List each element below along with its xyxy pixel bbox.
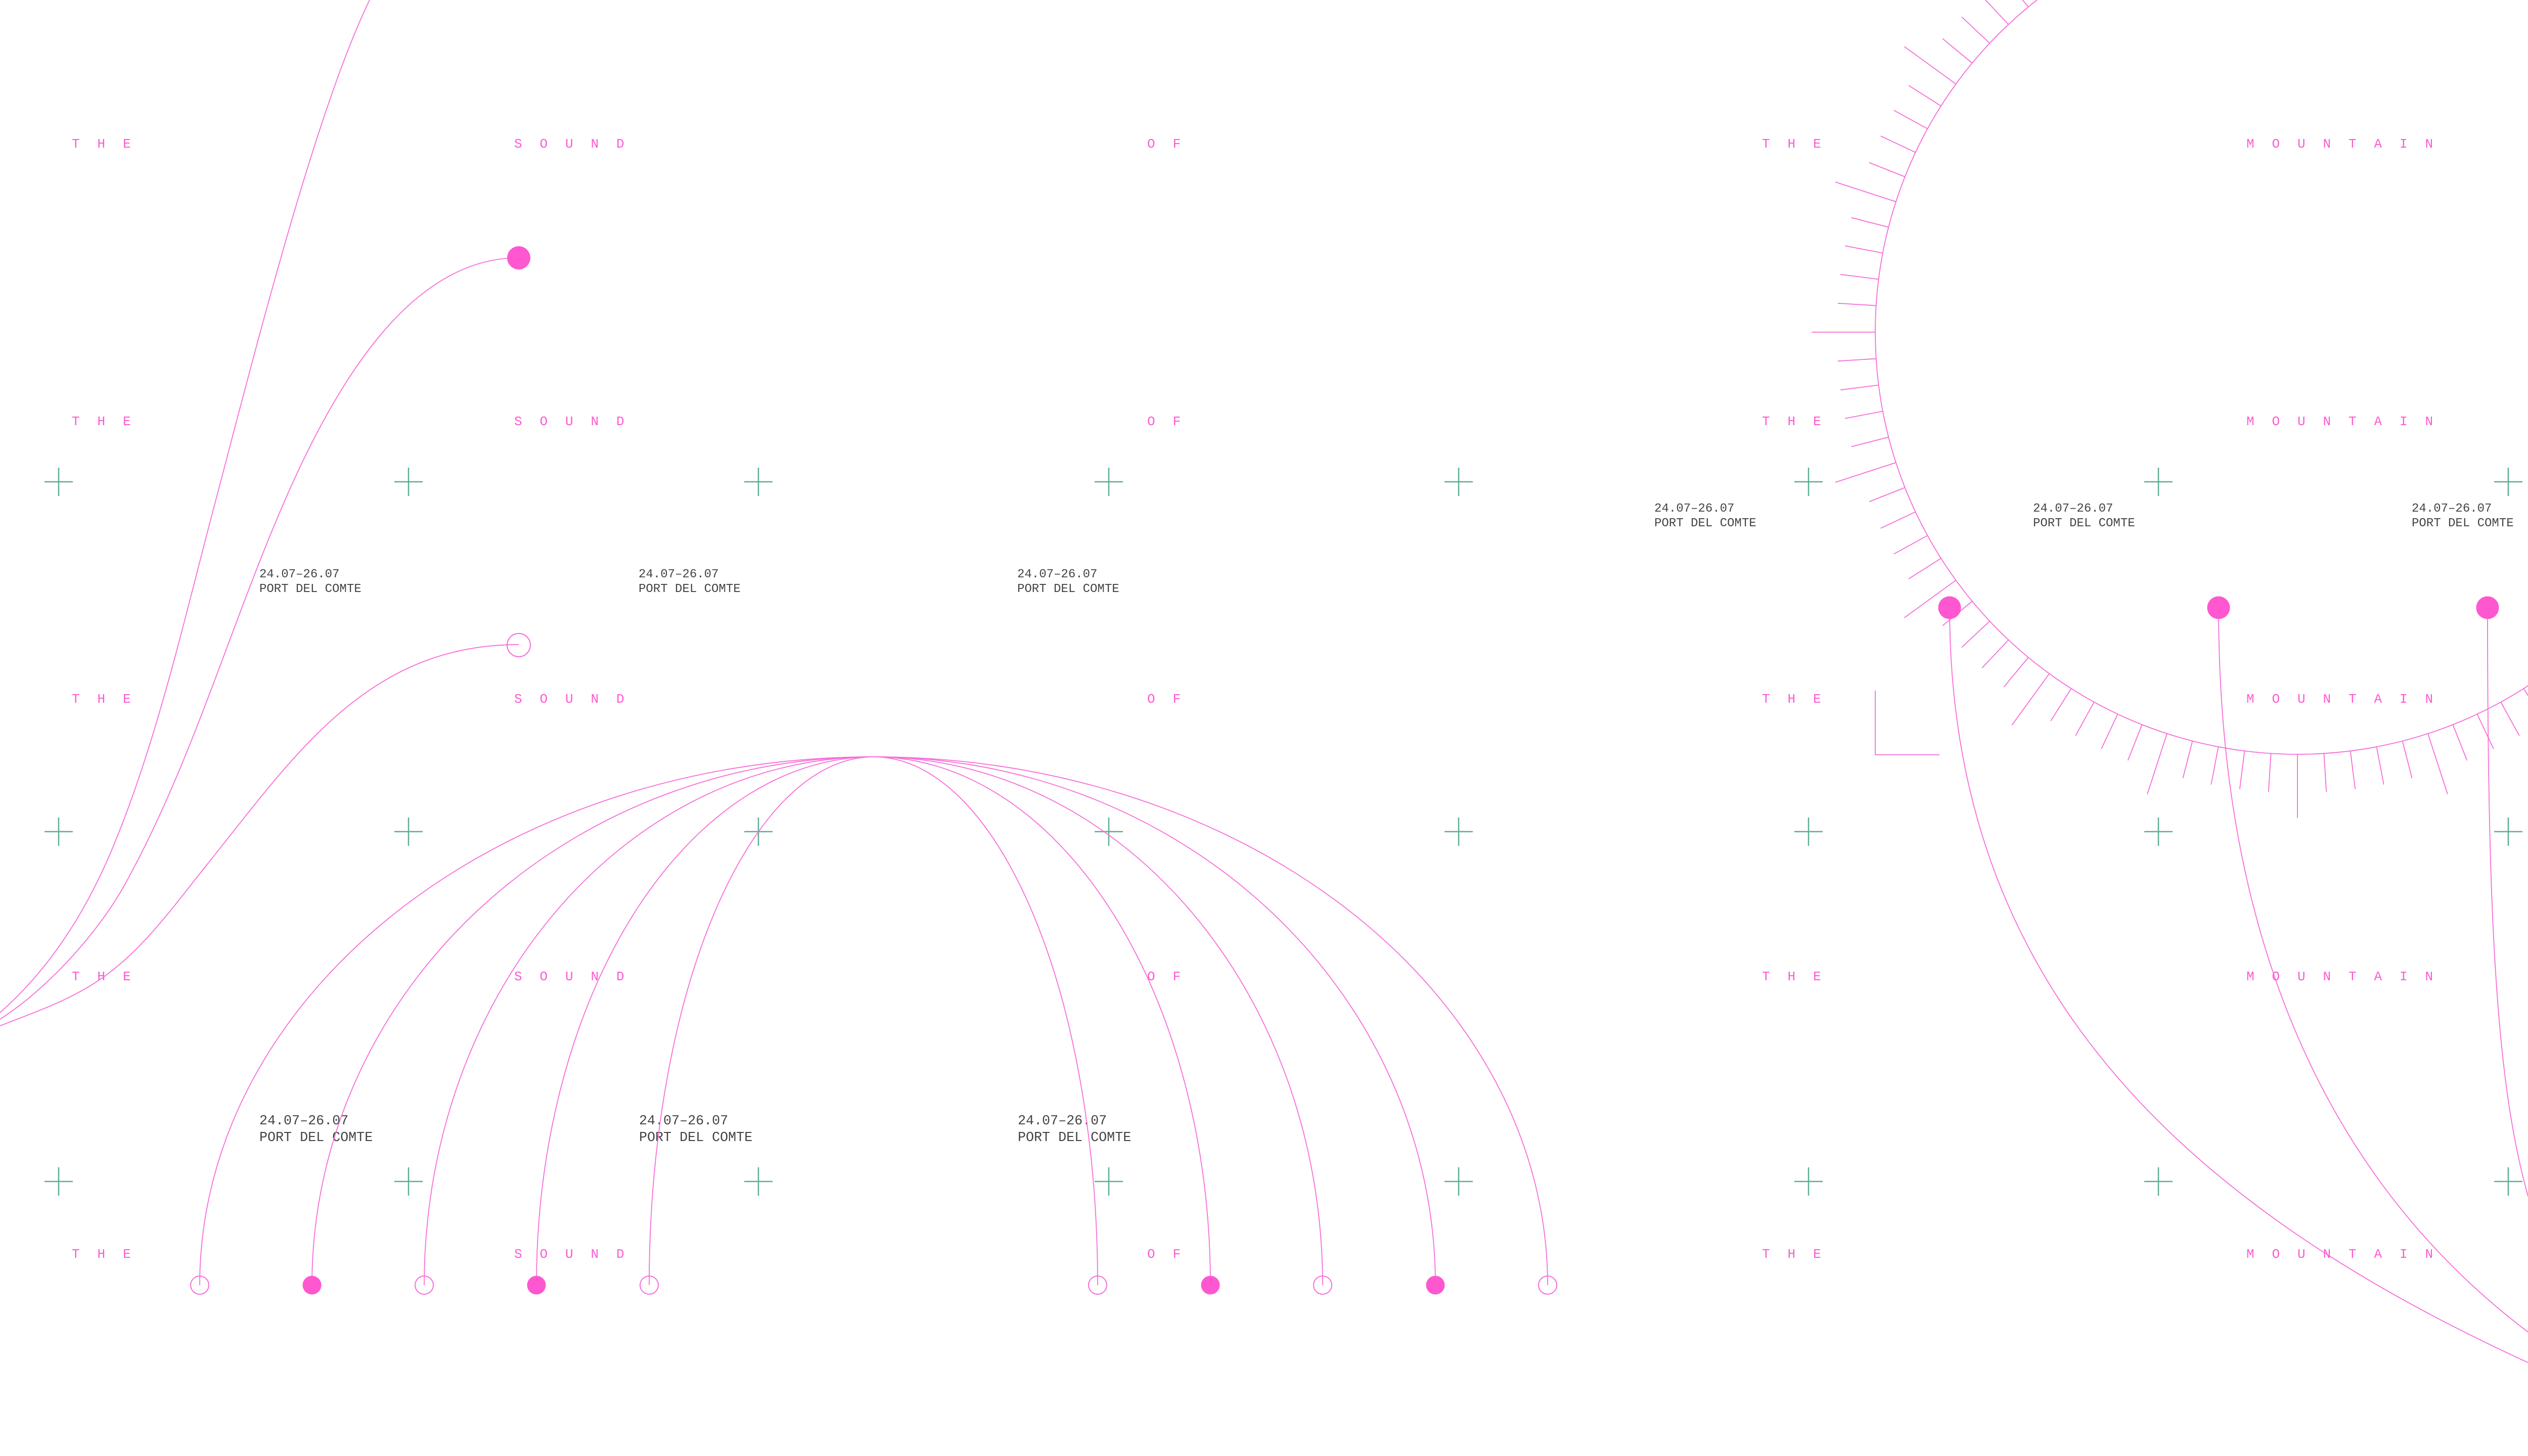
tick ring circle <box>1812 0 2528 818</box>
caption 7 <box>1654 502 1756 530</box>
left sweeping curves <box>0 0 530 1026</box>
title row 3: THE <box>1762 692 1839 707</box>
title row 2: MOUNTAIN <box>2246 414 2451 429</box>
title row 4: OF <box>1147 969 1198 984</box>
registration cross grid <box>44 468 2522 1196</box>
arch 6 with open dot <box>874 757 1107 1294</box>
arch 1 with open dot <box>191 757 874 1294</box>
title row 5: SOUND <box>514 1247 642 1262</box>
curve from second filled dot <box>2207 597 2528 1374</box>
title row 1: THE <box>72 136 149 152</box>
caption 6 <box>1018 1114 1131 1146</box>
title row 4: THE <box>1762 969 1839 984</box>
caption 3: PORT DEL COMTE <box>1017 582 1119 596</box>
caption 5: 24.07–26.07 <box>639 1114 728 1129</box>
arch 3 with open dot <box>415 757 874 1294</box>
caption 8 <box>2033 502 2135 530</box>
caption 7: 24.07–26.07 <box>1654 502 1734 516</box>
title row 2: THE <box>1762 414 1839 429</box>
title row 5: THE <box>72 1247 149 1262</box>
title row 5: MOUNTAIN <box>2246 1247 2451 1262</box>
corner bracket of the circle <box>1875 691 1939 755</box>
title row 4: SOUND <box>514 969 642 984</box>
title row 3 <box>72 692 2451 707</box>
caption 7: PORT DEL COMTE <box>1654 517 1756 530</box>
title row 2 <box>72 414 2451 429</box>
curve running off the top edge <box>0 0 370 1013</box>
caption 1: 24.07–26.07 <box>259 568 339 581</box>
arch 5 with open dot <box>640 757 874 1294</box>
title row 2: OF <box>1147 414 1198 429</box>
title row 3: MOUNTAIN <box>2246 692 2451 707</box>
title row 3: OF <box>1147 692 1198 707</box>
title row 1: OF <box>1147 136 1198 152</box>
arch 9 with filled dot <box>874 757 1445 1294</box>
caption 6: PORT DEL COMTE <box>1018 1130 1131 1146</box>
date and place captions, lower left row <box>259 1114 1131 1146</box>
caption 2 <box>639 568 741 596</box>
repeated title rows: THE SOUND OF THE MOUNTAIN <box>72 136 2451 1262</box>
arch 4 with filled dot <box>527 757 874 1294</box>
curve from first filled dot <box>1938 597 2528 1389</box>
title row 4 <box>72 969 2451 984</box>
arch 2 with filled dot <box>302 757 874 1294</box>
title row 1: THE <box>1762 136 1839 152</box>
title row 1 <box>72 136 2451 152</box>
title row 4: THE <box>72 969 149 984</box>
title row 3: THE <box>72 692 149 707</box>
title row 3: SOUND <box>514 692 642 707</box>
arch 8 with open dot <box>874 757 1332 1294</box>
arch 7 with filled dot <box>874 757 1220 1294</box>
title row 2: SOUND <box>514 414 642 429</box>
title row 4: MOUNTAIN <box>2246 969 2451 984</box>
arch of elliptical curves <box>191 757 1557 1294</box>
title row 5: OF <box>1147 1247 1198 1262</box>
curve from third filled dot <box>2476 597 2528 1330</box>
caption 5: PORT DEL COMTE <box>639 1130 752 1146</box>
caption 2: 24.07–26.07 <box>639 568 718 581</box>
curve ending in open dot <box>0 633 530 1026</box>
radial ticks <box>1812 0 2528 818</box>
caption 3 <box>1017 568 1119 596</box>
date and place captions, upper right row <box>1654 502 2514 530</box>
caption 4: PORT DEL COMTE <box>259 1130 373 1146</box>
date and place captions, upper left row <box>259 568 1119 596</box>
caption 1: PORT DEL COMTE <box>259 582 362 596</box>
title row 1: SOUND <box>514 136 642 152</box>
caption 4 <box>259 1114 373 1146</box>
caption 3: 24.07–26.07 <box>1017 568 1097 581</box>
caption 9: PORT DEL COMTE <box>2412 517 2514 530</box>
caption 4: 24.07–26.07 <box>259 1114 348 1129</box>
caption 1 <box>259 568 362 596</box>
caption 5 <box>639 1114 752 1146</box>
title row 5: THE <box>1762 1247 1839 1262</box>
title row 2: THE <box>72 414 149 429</box>
caption 8: PORT DEL COMTE <box>2033 517 2135 530</box>
curve ending in filled dot <box>0 246 530 1019</box>
right sweeping curves <box>1938 597 2528 1389</box>
caption 6: 24.07–26.07 <box>1018 1114 1107 1129</box>
caption 2: PORT DEL COMTE <box>639 582 741 596</box>
ring <box>1875 0 2528 754</box>
arch 10 with open dot <box>874 757 1557 1294</box>
title row 1: MOUNTAIN <box>2246 136 2451 152</box>
caption 8: 24.07–26.07 <box>2033 502 2113 516</box>
title row 5 <box>72 1247 2451 1262</box>
caption 9: 24.07–26.07 <box>2412 502 2492 516</box>
caption 9 <box>2412 502 2514 530</box>
